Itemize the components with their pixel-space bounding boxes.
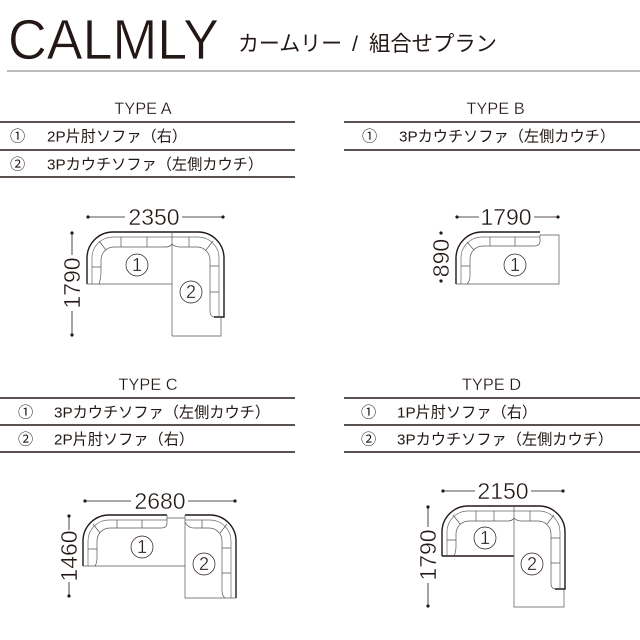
callout 1: 1 [480,528,490,548]
list: type B items: ① [362,128,377,146]
depth dimension: 1790: 1790 [415,529,441,581]
subtitle [238,32,497,56]
list: type A items: ① [10,128,25,146]
list: type B items: 3Pカウチソファ（左側カウチ） [399,128,615,146]
list: type A items: 3Pカウチソファ（左側カウチ） [47,156,263,174]
depth dimension: 1790 [59,231,85,337]
width dimension: 2150: 2150 [477,478,529,504]
width dimension: 2350: 2350 [128,204,180,230]
depth dimension: 1790 [415,505,441,608]
heading: type D: TYPE D [462,376,521,394]
heading: type C: TYPE C [118,376,178,394]
list: type D items: 3Pカウチソファ（左側カウチ） [397,432,613,448]
list: type A items [10,128,263,174]
sofa plan: type A [87,232,224,336]
heading: type A: TYPE A [114,100,172,118]
width dimension: 2680: 2680 [134,488,186,514]
depth dimension: 1460 [56,514,82,598]
depth dimension: 1460: 1460 [56,530,82,582]
callout 1: 1 [132,255,142,275]
panel: type D [344,376,640,608]
subtitle: 組合せプラン [369,32,497,56]
width dimension: 2350 [86,204,225,230]
callout 2: 2 [186,282,196,302]
list: type D items [361,404,613,448]
depth dimension: 890: 890 [428,239,454,277]
list: type D items: ① [361,404,376,422]
width dimension: 1790: 1790 [480,204,532,230]
callout 1: 1 [137,537,147,557]
subtitle: カームリー [238,32,342,56]
callout 2: 2 [199,554,209,574]
width dimension: 2680 [83,488,237,514]
width dimension: 1790 [455,204,560,230]
panel: type C [0,376,295,598]
list: type D items: 1P片肘ソファ（右） [397,404,537,422]
list: type C items [18,404,270,448]
list: type C items: ② [18,432,33,448]
list: type D items: ② [361,432,376,448]
panel: type A [0,100,295,337]
callout 1 [131,536,153,558]
sofa plan: type B [456,232,559,284]
list: type C items: 2P片肘ソファ（右） [54,432,194,448]
heading: type B: TYPE B [466,100,525,118]
list: type A items: ② [10,156,25,174]
callout 2: 2 [527,554,537,574]
callout 2 [193,553,215,575]
list: type A items: 2P片肘ソファ（右） [47,128,187,146]
subtitle: / [352,32,358,56]
list: type C items: 3Pカウチソファ（左側カウチ） [54,404,270,422]
panel: type B [344,100,640,284]
sofa plan: type C [83,515,236,598]
list: type C items: ① [18,404,33,422]
sofa plan: type D [442,506,565,607]
title: CALMLY [8,8,219,72]
callout 1: 1 [510,255,520,275]
width dimension: 2150 [441,478,565,504]
depth dimension: 1790: 1790 [59,257,85,309]
